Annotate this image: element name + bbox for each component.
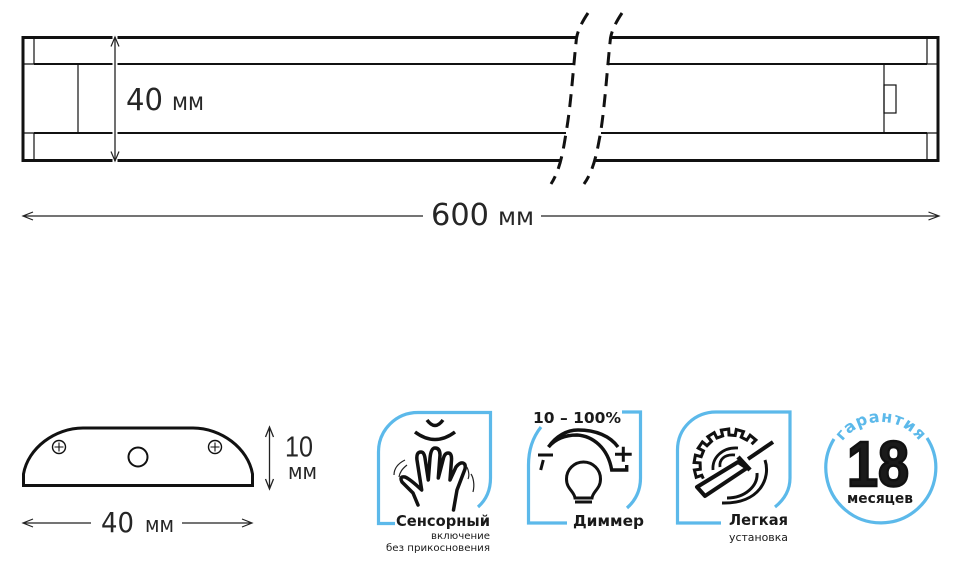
right screw ring [208,440,222,454]
horizontal arrow [23,519,252,527]
profile [24,428,252,486]
end view drawing [24,428,252,486]
unit: мм [145,513,174,538]
heading: Диммер [573,512,644,530]
motion arcs [722,460,767,503]
blue frame [378,412,490,524]
arc label: гарантия [836,413,925,440]
blue frame [528,412,640,523]
range label: 10 – 100% [533,409,621,427]
dial track [548,435,627,470]
unit: мм [498,202,534,231]
center hole [128,448,148,466]
caption: установка [729,531,788,544]
width dimension 40 mm [23,506,252,539]
caption line 2: без прикосновения [386,543,490,554]
heading: Легкая [729,511,788,529]
screwdriver handle [697,462,747,496]
bulb [566,462,600,502]
unit: мм [172,87,204,116]
vertical arrow [111,36,119,162]
badge: warranty [824,413,938,524]
value: 40 [126,83,163,118]
unit: месяцев [847,491,913,507]
horizontal arrow [23,212,939,220]
left screw [54,442,64,452]
hand [401,448,465,510]
end cap details [23,37,938,160]
break mark left [551,13,588,184]
blue frame [678,412,790,523]
blue ring [826,438,936,523]
inner gear arcs [713,448,738,470]
minus sign [538,455,553,470]
caption line 1: включение [431,531,490,542]
unit: мм [288,460,317,485]
icon: easy installation [678,412,790,544]
plus sign [615,447,632,462]
outer body: left segment [23,38,576,160]
value: 600 [431,198,489,233]
dial scale [548,430,618,447]
heading: Сенсорный [396,512,490,530]
screwdriver shaft [748,442,773,459]
top view drawing of the lamp [23,13,938,184]
sensor waves [415,420,455,440]
vertical arrow [266,427,274,489]
height dimension 10 mm [266,427,317,489]
number: 18 [847,428,909,500]
height dimension 40 mm [111,36,204,162]
outer body: right segment [595,38,938,160]
right screw [210,442,220,452]
break mark right [584,13,622,184]
left screw ring [52,440,66,454]
gear outline [694,429,756,479]
inner rails [34,64,927,133]
value: 40 [101,506,134,539]
screwdriver collar [738,457,750,470]
length dimension 600 mm [23,198,939,233]
value: 10 [285,432,313,464]
motion marks [394,460,474,492]
icon: dimmer [528,409,644,530]
switch [884,85,896,113]
icon: sensor [378,412,490,554]
